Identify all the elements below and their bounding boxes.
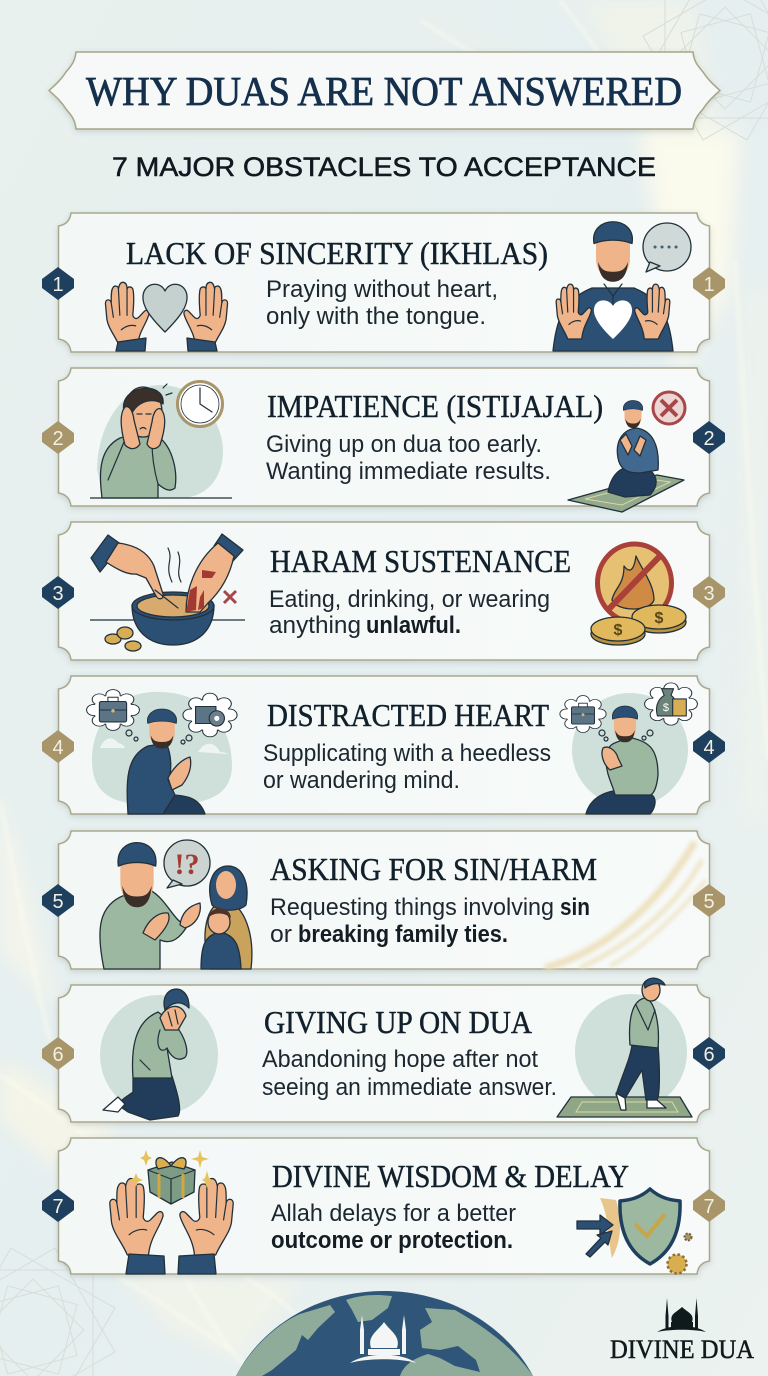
heading: GIVING UP ON DUA <box>264 1004 532 1040</box>
badge 4 right <box>693 730 725 763</box>
icon: distracted man in green: $ <box>663 702 669 714</box>
logo <box>610 1298 754 1364</box>
description: breaking family ties. <box>298 921 508 948</box>
description: Eating, drinking, or wearing <box>269 586 550 613</box>
badge 5 left <box>42 884 74 917</box>
icon: forbidden fire and coins: $ <box>614 622 623 639</box>
icon: hands receiving gift <box>110 1150 233 1274</box>
badge 3 left: 3 <box>52 583 64 605</box>
description <box>262 1046 557 1101</box>
description: unlawful. <box>366 612 461 639</box>
description <box>266 431 551 485</box>
panel: distracted heart <box>42 676 725 814</box>
icon: man, family and question bubble: !? <box>174 848 200 881</box>
panel: haram sustenance <box>42 522 725 660</box>
badge 2 left <box>42 421 74 454</box>
description: Abandoning hope after not <box>262 1046 538 1073</box>
heading: HARAM SUSTENANCE <box>270 543 571 579</box>
heading: IMPATIENCE (ISTIJAJAL) <box>267 388 603 424</box>
heading: DISTRACTED HEART <box>267 697 549 733</box>
description: or <box>270 921 292 948</box>
description <box>271 1200 516 1254</box>
description: Supplicating with a heedless <box>263 740 551 767</box>
badge 5 right <box>693 884 725 917</box>
heading: ASKING FOR SIN/HARM <box>270 851 597 887</box>
badge 1 right: 1 <box>703 274 715 296</box>
description: anything <box>269 612 361 639</box>
badge 3 right <box>693 576 725 609</box>
badge 4 left: 4 <box>52 737 64 759</box>
icon: forbidden fire and coins <box>591 544 686 645</box>
badge 3 right: 3 <box>703 583 715 605</box>
brand name: DIVINE DUA <box>610 1335 754 1364</box>
description: Wanting immediate results. <box>266 458 551 485</box>
title: WHY DUAS ARE NOT ANSWERED <box>86 68 682 114</box>
badge 2 left: 2 <box>52 428 64 450</box>
badge 4 left <box>42 730 74 763</box>
description: Requesting things involving <box>270 894 554 921</box>
title banner <box>49 52 720 129</box>
description: sin <box>560 894 590 921</box>
badge 7 right: 7 <box>703 1196 715 1218</box>
badge 7 left <box>42 1189 74 1222</box>
badge 1 left <box>42 267 74 300</box>
icon: distracted man in green <box>560 683 697 814</box>
badge 1 right <box>693 267 725 300</box>
badge 1 left: 1 <box>52 274 64 296</box>
panel: impatience <box>42 368 725 512</box>
badge 7 right <box>693 1189 725 1222</box>
panel: giving up on dua <box>42 978 725 1122</box>
mosque emblem <box>350 1315 416 1363</box>
description: outcome or protection. <box>271 1227 513 1254</box>
icon: man, family and question bubble <box>100 840 252 969</box>
icon: bowl, hands and coins <box>90 534 245 651</box>
heading: DIVINE WISDOM & DELAY <box>272 1158 629 1194</box>
panel: asking for sin <box>42 831 725 969</box>
description: seeing an immediate answer. <box>262 1074 557 1101</box>
decorative star pattern bottom left <box>0 1248 115 1376</box>
description <box>270 894 590 948</box>
description: Praying without heart, <box>266 276 498 303</box>
description: Allah delays for a better <box>271 1200 516 1227</box>
description <box>266 276 498 330</box>
icon: kneeling man covering face <box>100 989 218 1120</box>
description: Giving up on dua too early. <box>266 431 542 458</box>
badge 2 right <box>693 421 725 454</box>
badge 2 right: 2 <box>703 428 715 450</box>
badge 7 left: 7 <box>52 1196 64 1218</box>
panel: lack of sincerity <box>42 213 725 352</box>
icon: hands with heart <box>105 282 228 351</box>
description: only with the tongue. <box>266 303 486 330</box>
icon: distracted man in navy <box>87 690 237 814</box>
icon: kneeling man on rug with cross <box>568 392 685 512</box>
badge 5 right: 5 <box>703 891 715 913</box>
description <box>269 586 550 639</box>
badge 6 right <box>693 1037 725 1070</box>
description: or wandering mind. <box>263 767 460 794</box>
heading: LACK OF SINCERITY (IKHLAS) <box>126 235 548 271</box>
panel: divine wisdom and delay <box>42 1138 725 1274</box>
icon: man walking off prayer rug <box>557 978 692 1117</box>
badge 6 right: 6 <box>703 1044 715 1066</box>
badge 4 right: 4 <box>703 737 715 759</box>
icon: shield with check and arrows <box>577 1189 692 1274</box>
icon: forbidden fire and coins: $ <box>655 610 664 627</box>
badge 3 left <box>42 576 74 609</box>
badge 6 left: 6 <box>52 1044 64 1066</box>
logo mosque <box>657 1298 706 1332</box>
subtitle: 7 MAJOR OBSTACLES TO ACCEPTANCE <box>112 152 656 182</box>
icon: anxious man and clock <box>90 382 232 498</box>
badge 6 left <box>42 1037 74 1070</box>
icon: praying man with heart <box>553 222 691 351</box>
globe with mosque <box>236 1291 533 1376</box>
decorative star pattern top right <box>643 0 768 140</box>
badge 5 left: 5 <box>52 891 64 913</box>
description <box>263 740 551 794</box>
decorative gold swirl <box>545 842 706 968</box>
